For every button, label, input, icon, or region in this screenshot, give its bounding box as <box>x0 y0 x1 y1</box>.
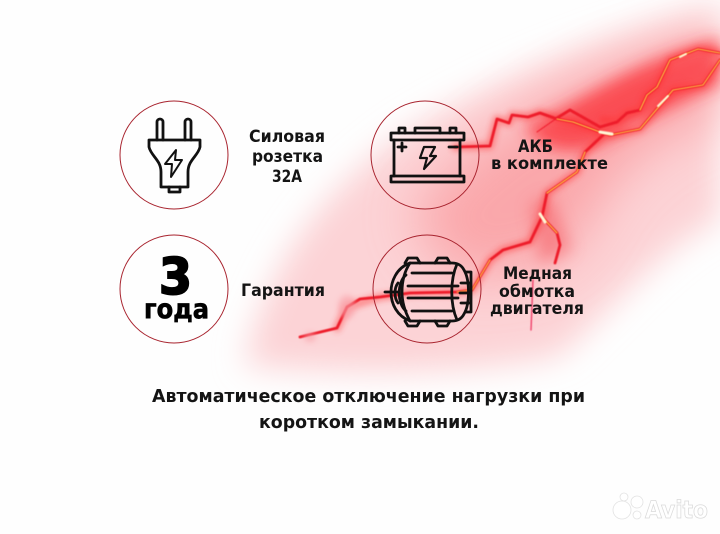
label: battery <box>491 137 608 173</box>
label: motor: двигателя <box>490 299 584 318</box>
label: socket <box>249 127 325 186</box>
panel: motor <box>373 235 584 343</box>
caption: Автоматическое отключение нагрузки при <box>152 387 585 407</box>
label: socket: розетка <box>252 147 323 166</box>
circle frame: motor <box>373 235 481 343</box>
label: warranty: Гарантия <box>241 281 325 300</box>
caption <box>152 387 585 433</box>
circle frame: plug <box>120 101 228 209</box>
watermark: Avito: Avito <box>645 496 708 524</box>
lightning bolts <box>300 49 720 342</box>
icon: battery <box>391 128 464 182</box>
red glow <box>245 5 720 372</box>
panel: power socket <box>120 101 325 209</box>
big number 3: 3 <box>159 248 192 306</box>
label: battery: в комплекте <box>491 154 608 173</box>
panel: battery <box>371 101 608 209</box>
icon: plug <box>149 119 200 192</box>
label: socket: Силовая <box>249 127 325 146</box>
icon: motor <box>385 258 471 326</box>
label: battery: АКБ <box>518 137 553 156</box>
years word: года <box>144 294 209 325</box>
watermark: Avito <box>613 493 708 524</box>
label: socket: 32А <box>272 167 302 186</box>
panel: warranty <box>120 235 325 343</box>
label: motor <box>490 264 584 318</box>
label: motor: Медная <box>503 264 572 283</box>
label: motor: обмотка <box>499 282 575 301</box>
circle frame: battery <box>371 101 479 209</box>
caption: коротком замыкании. <box>259 413 479 433</box>
circle frame: warranty <box>120 235 228 343</box>
